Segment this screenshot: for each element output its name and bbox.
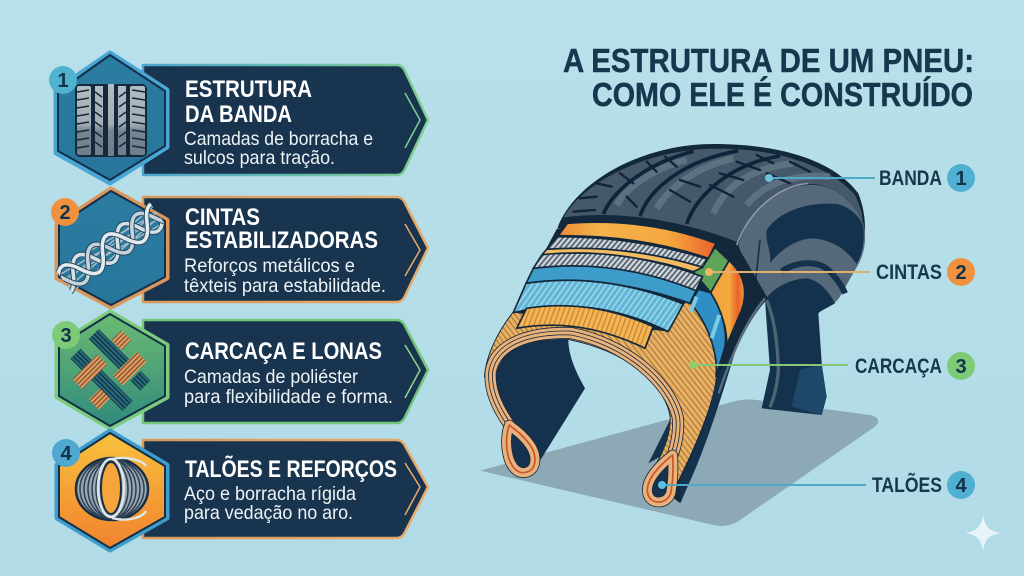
text block 1: Camadas de borracha e [184,128,373,150]
callout: banda: BANDA [879,167,942,190]
card body 4 [143,440,428,538]
badge 3: 3 [60,325,72,347]
carcass layer [485,297,716,502]
icon: tire tread [75,84,147,157]
hatched orange ply [517,306,653,348]
chevron 3 [405,345,420,398]
gray belt 2 [533,253,703,291]
badge 3 [52,321,80,349]
callout: cintas: CINTAS [876,261,942,284]
text block 4: para vedação no aro. [184,502,353,524]
rear sidewall band [738,185,865,312]
right orange layer [711,261,745,345]
hexagon icon frame 4 [57,431,167,550]
ground shadow [480,399,878,526]
badge 2: 2 [59,202,71,224]
icon: sparkle watermark [965,515,1001,551]
orange cap ply [558,222,716,258]
callout: talões [658,471,975,499]
text block 2: Reforços metálicos e [184,255,355,277]
layer stack [513,222,745,377]
inner navy behind right wall [648,417,672,463]
text block 3: para flexibilidade e forma. [184,386,393,408]
bead left [507,425,535,473]
right blue layer [691,289,726,377]
icon: steel bead coil [76,458,148,520]
rear sidewall dark recess [766,204,864,264]
green layer [693,247,729,293]
card body 2 [143,197,428,302]
badge 4: 4 [60,443,72,465]
text block 1: sulcos para tração. [184,147,335,169]
text block 2: têxteis para estabilidade. [184,275,386,297]
icon: braided steel cables [55,202,165,294]
chevron 2 [405,224,420,276]
chevron 1 [405,93,420,148]
callout: cintas: 2 [955,262,967,284]
text block 1 [184,76,373,169]
text block 1: DA BANDA [185,101,292,128]
tread and rear sidewall [557,144,865,415]
hexagon icon frame 3 [57,312,167,428]
hatched blue ply [513,280,683,332]
section backing [485,226,767,502]
title: A ESTRUTURA DE UM PNEU: [563,42,974,79]
badge 1 [49,66,77,94]
inner cavity [496,339,585,463]
panel: talões e reforços [52,431,428,550]
card body 1 [143,65,428,175]
title: COMO ELE É CONSTRUÍDO [592,76,973,113]
hexagon icon frame 1 [56,53,167,183]
rear leg [762,278,835,415]
callout: talões: 4 [955,475,967,497]
icon: woven layers [58,318,162,422]
blue band [526,266,696,303]
hexagon icon frame 2 [57,189,167,307]
text block 3 [184,338,393,408]
gray belt 1 [547,237,707,267]
text block 1: ESTRUTURA [185,76,312,103]
text block 4: Aço e borracha rígida [184,483,356,505]
text block 4 [184,455,397,524]
text block 2: CINTAS [185,204,260,231]
badge 2 [51,198,79,226]
text block 3: CARCAÇA E LONAS [185,338,382,365]
callout: carcaça: 3 [955,356,967,378]
text block 2 [184,204,386,297]
callout: talões: TALÕES [872,473,942,497]
text block 3: Camadas de poliéster [184,366,358,388]
title [563,42,974,113]
chevron 4 [405,463,420,515]
badge 1: 1 [57,70,69,92]
callout: banda [765,164,975,192]
text block 2: ESTABILIZADORAS [185,227,378,254]
badge 4 [52,439,80,467]
callout: carcaça [689,352,975,380]
text block 4: TALÕES E REFORÇOS [185,455,397,483]
callout: carcaça: CARCAÇA [855,355,942,378]
yellow strip [542,248,703,272]
panel: cintas estabilizadoras [51,186,430,310]
ply lines along arch [491,333,678,455]
panel: estrutura da banda [49,53,428,183]
lighter tread strips [617,158,830,213]
tread grooves [603,151,780,224]
lower sidewall edge [678,298,765,501]
callout: cintas [705,258,975,286]
callout: banda: 1 [955,168,967,190]
tire cross-section illustration [480,144,878,526]
card body 3 [143,320,428,423]
panel: carcaça e lonas [52,312,428,428]
bead right [647,455,673,502]
